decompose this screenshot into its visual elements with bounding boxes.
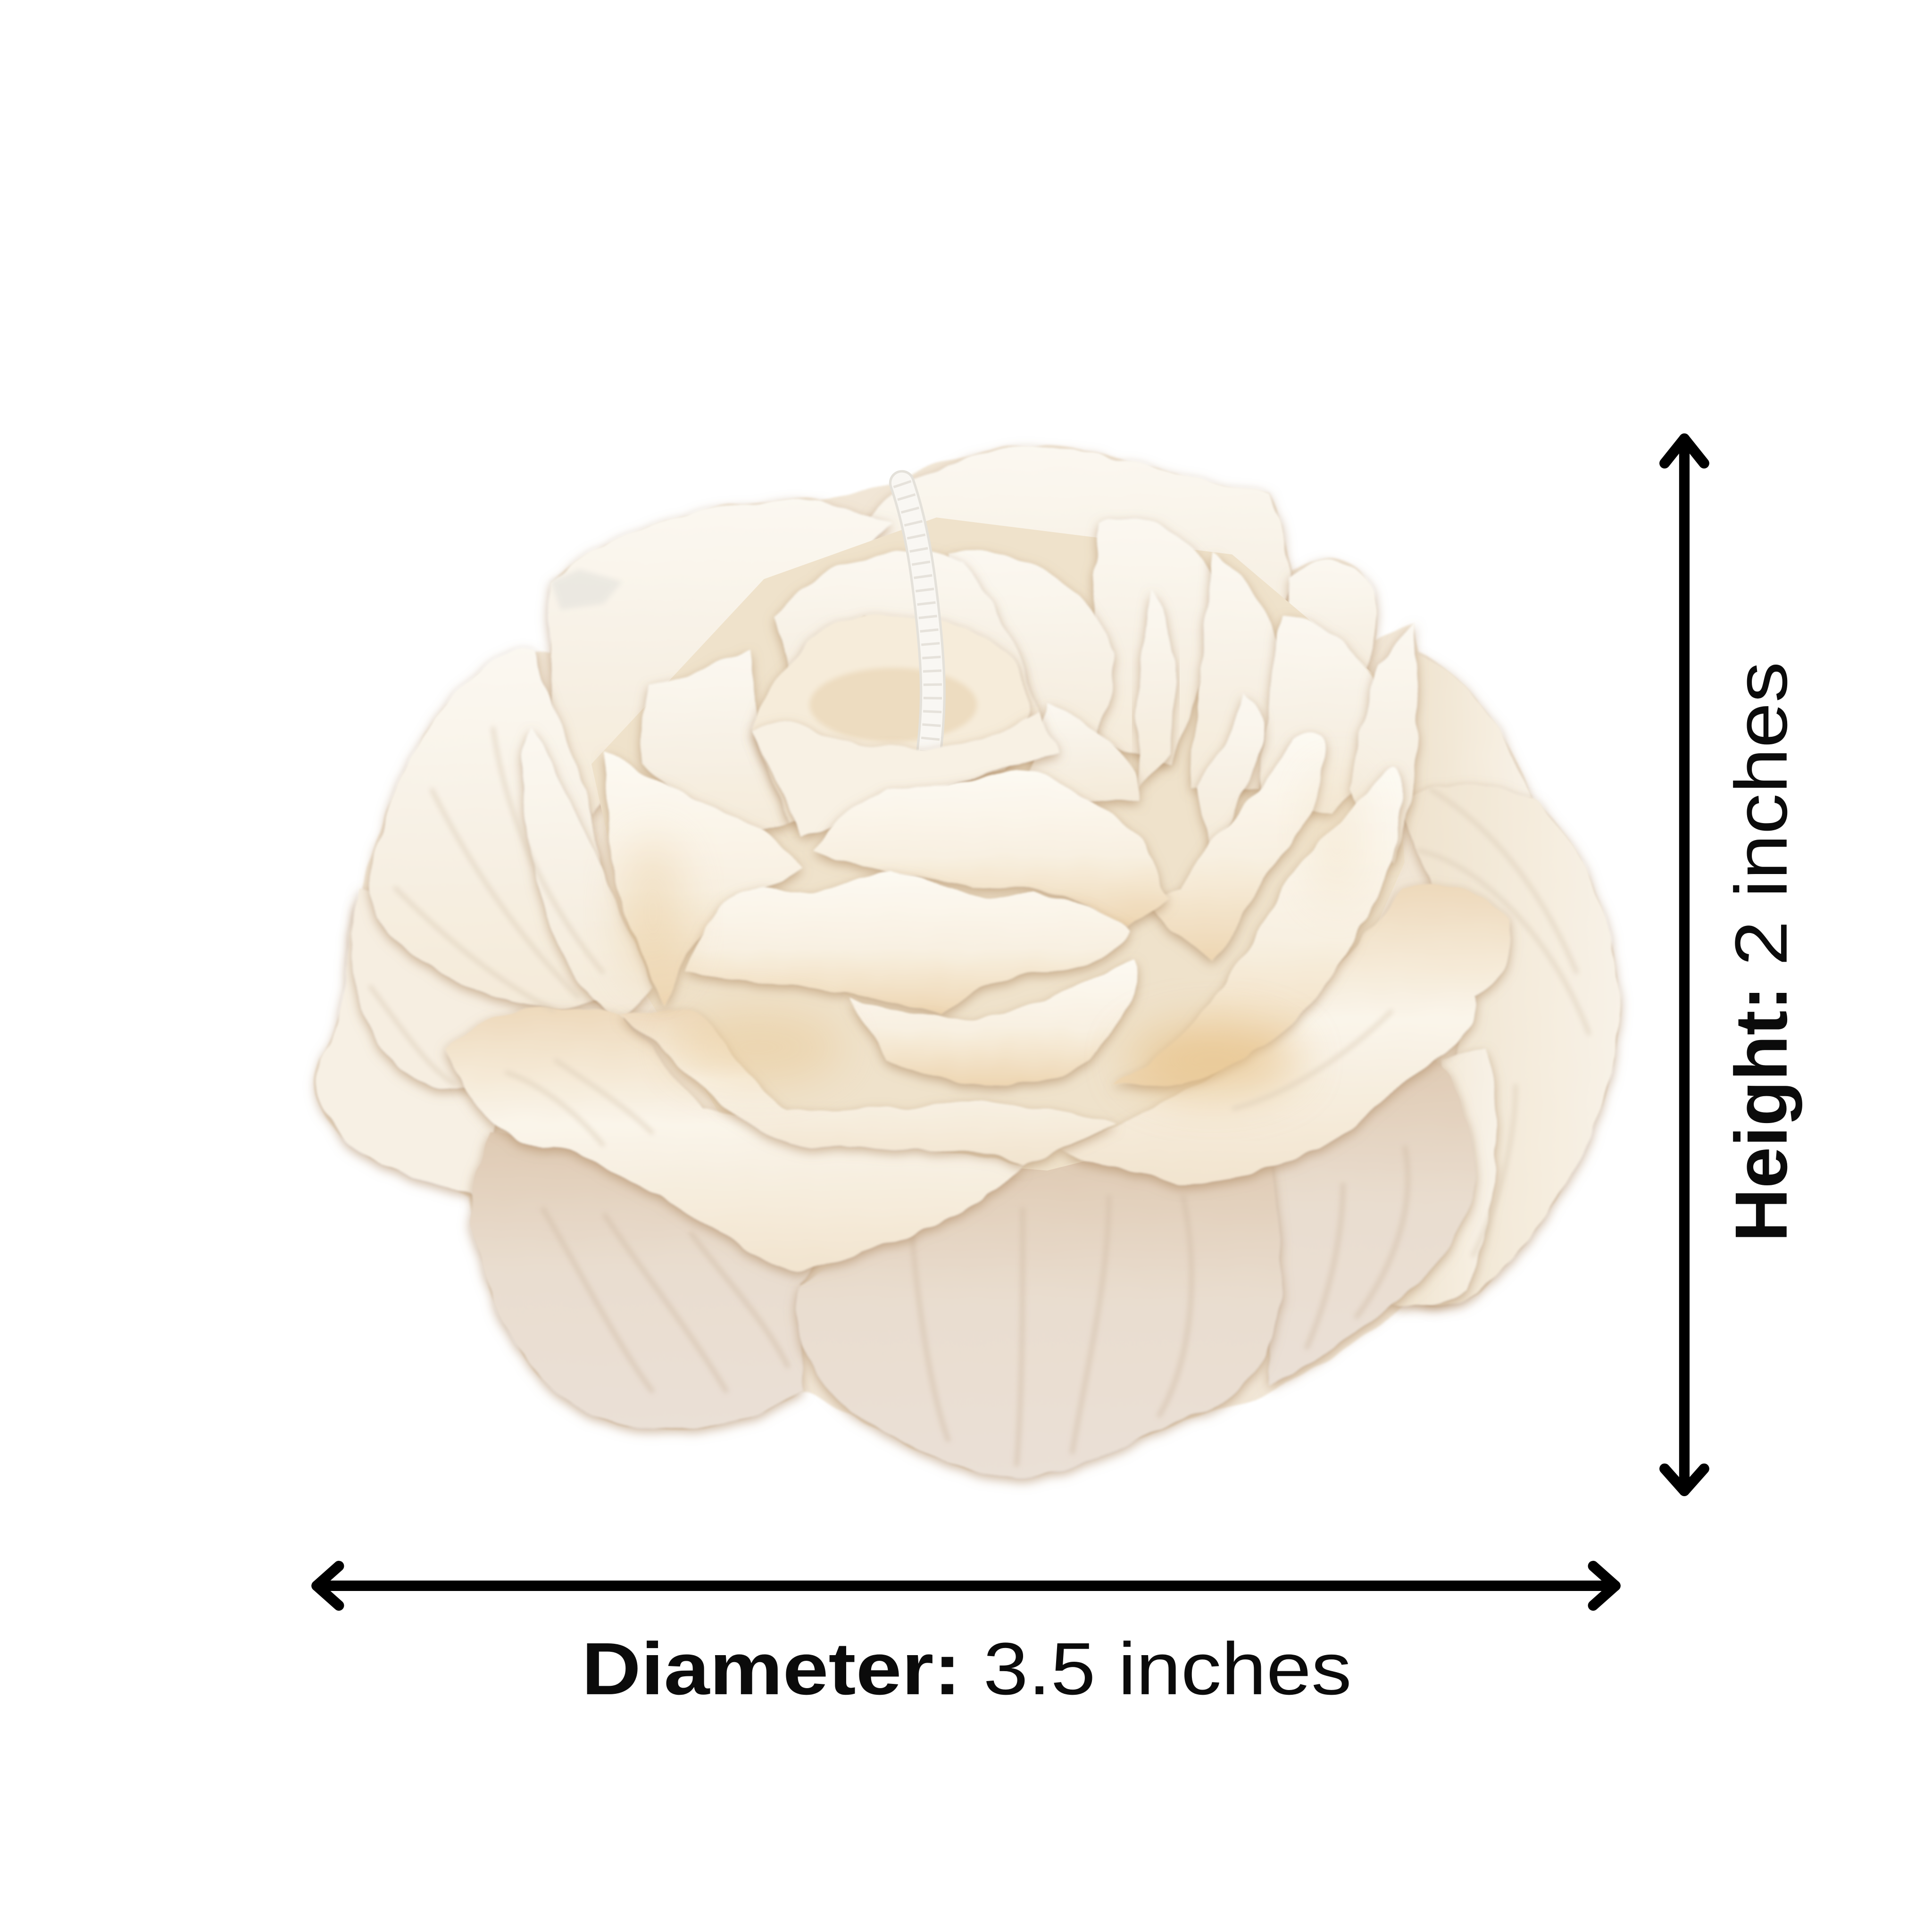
- petal veins, lower: [542, 1146, 1408, 1466]
- label: height: 2 inches: [1720, 662, 1803, 966]
- wick: [902, 483, 933, 751]
- center front petals: [604, 731, 1324, 1085]
- label: diameter: [582, 1628, 1352, 1710]
- label: diameter: 3.5 inches: [983, 1628, 1352, 1710]
- center rosette: [754, 615, 1028, 825]
- upper bowl: [591, 517, 1419, 1171]
- label: height: Height:: [1720, 986, 1803, 1242]
- flower candle: [315, 446, 1620, 1479]
- arrow: height: [1665, 439, 1704, 1491]
- back petals: [316, 446, 1620, 1305]
- petal veins, upper: [370, 727, 1590, 1257]
- silhouette base: [315, 446, 1620, 1479]
- label: diameter: Diameter:: [582, 1628, 961, 1710]
- label: height: [1720, 662, 1803, 1242]
- warm shading: [621, 770, 1364, 1097]
- arrow: diameter: [316, 1566, 1616, 1606]
- mid outer petals: [446, 727, 1510, 1268]
- rosette lip: [754, 712, 1060, 838]
- lower beige petals: [472, 1047, 1496, 1479]
